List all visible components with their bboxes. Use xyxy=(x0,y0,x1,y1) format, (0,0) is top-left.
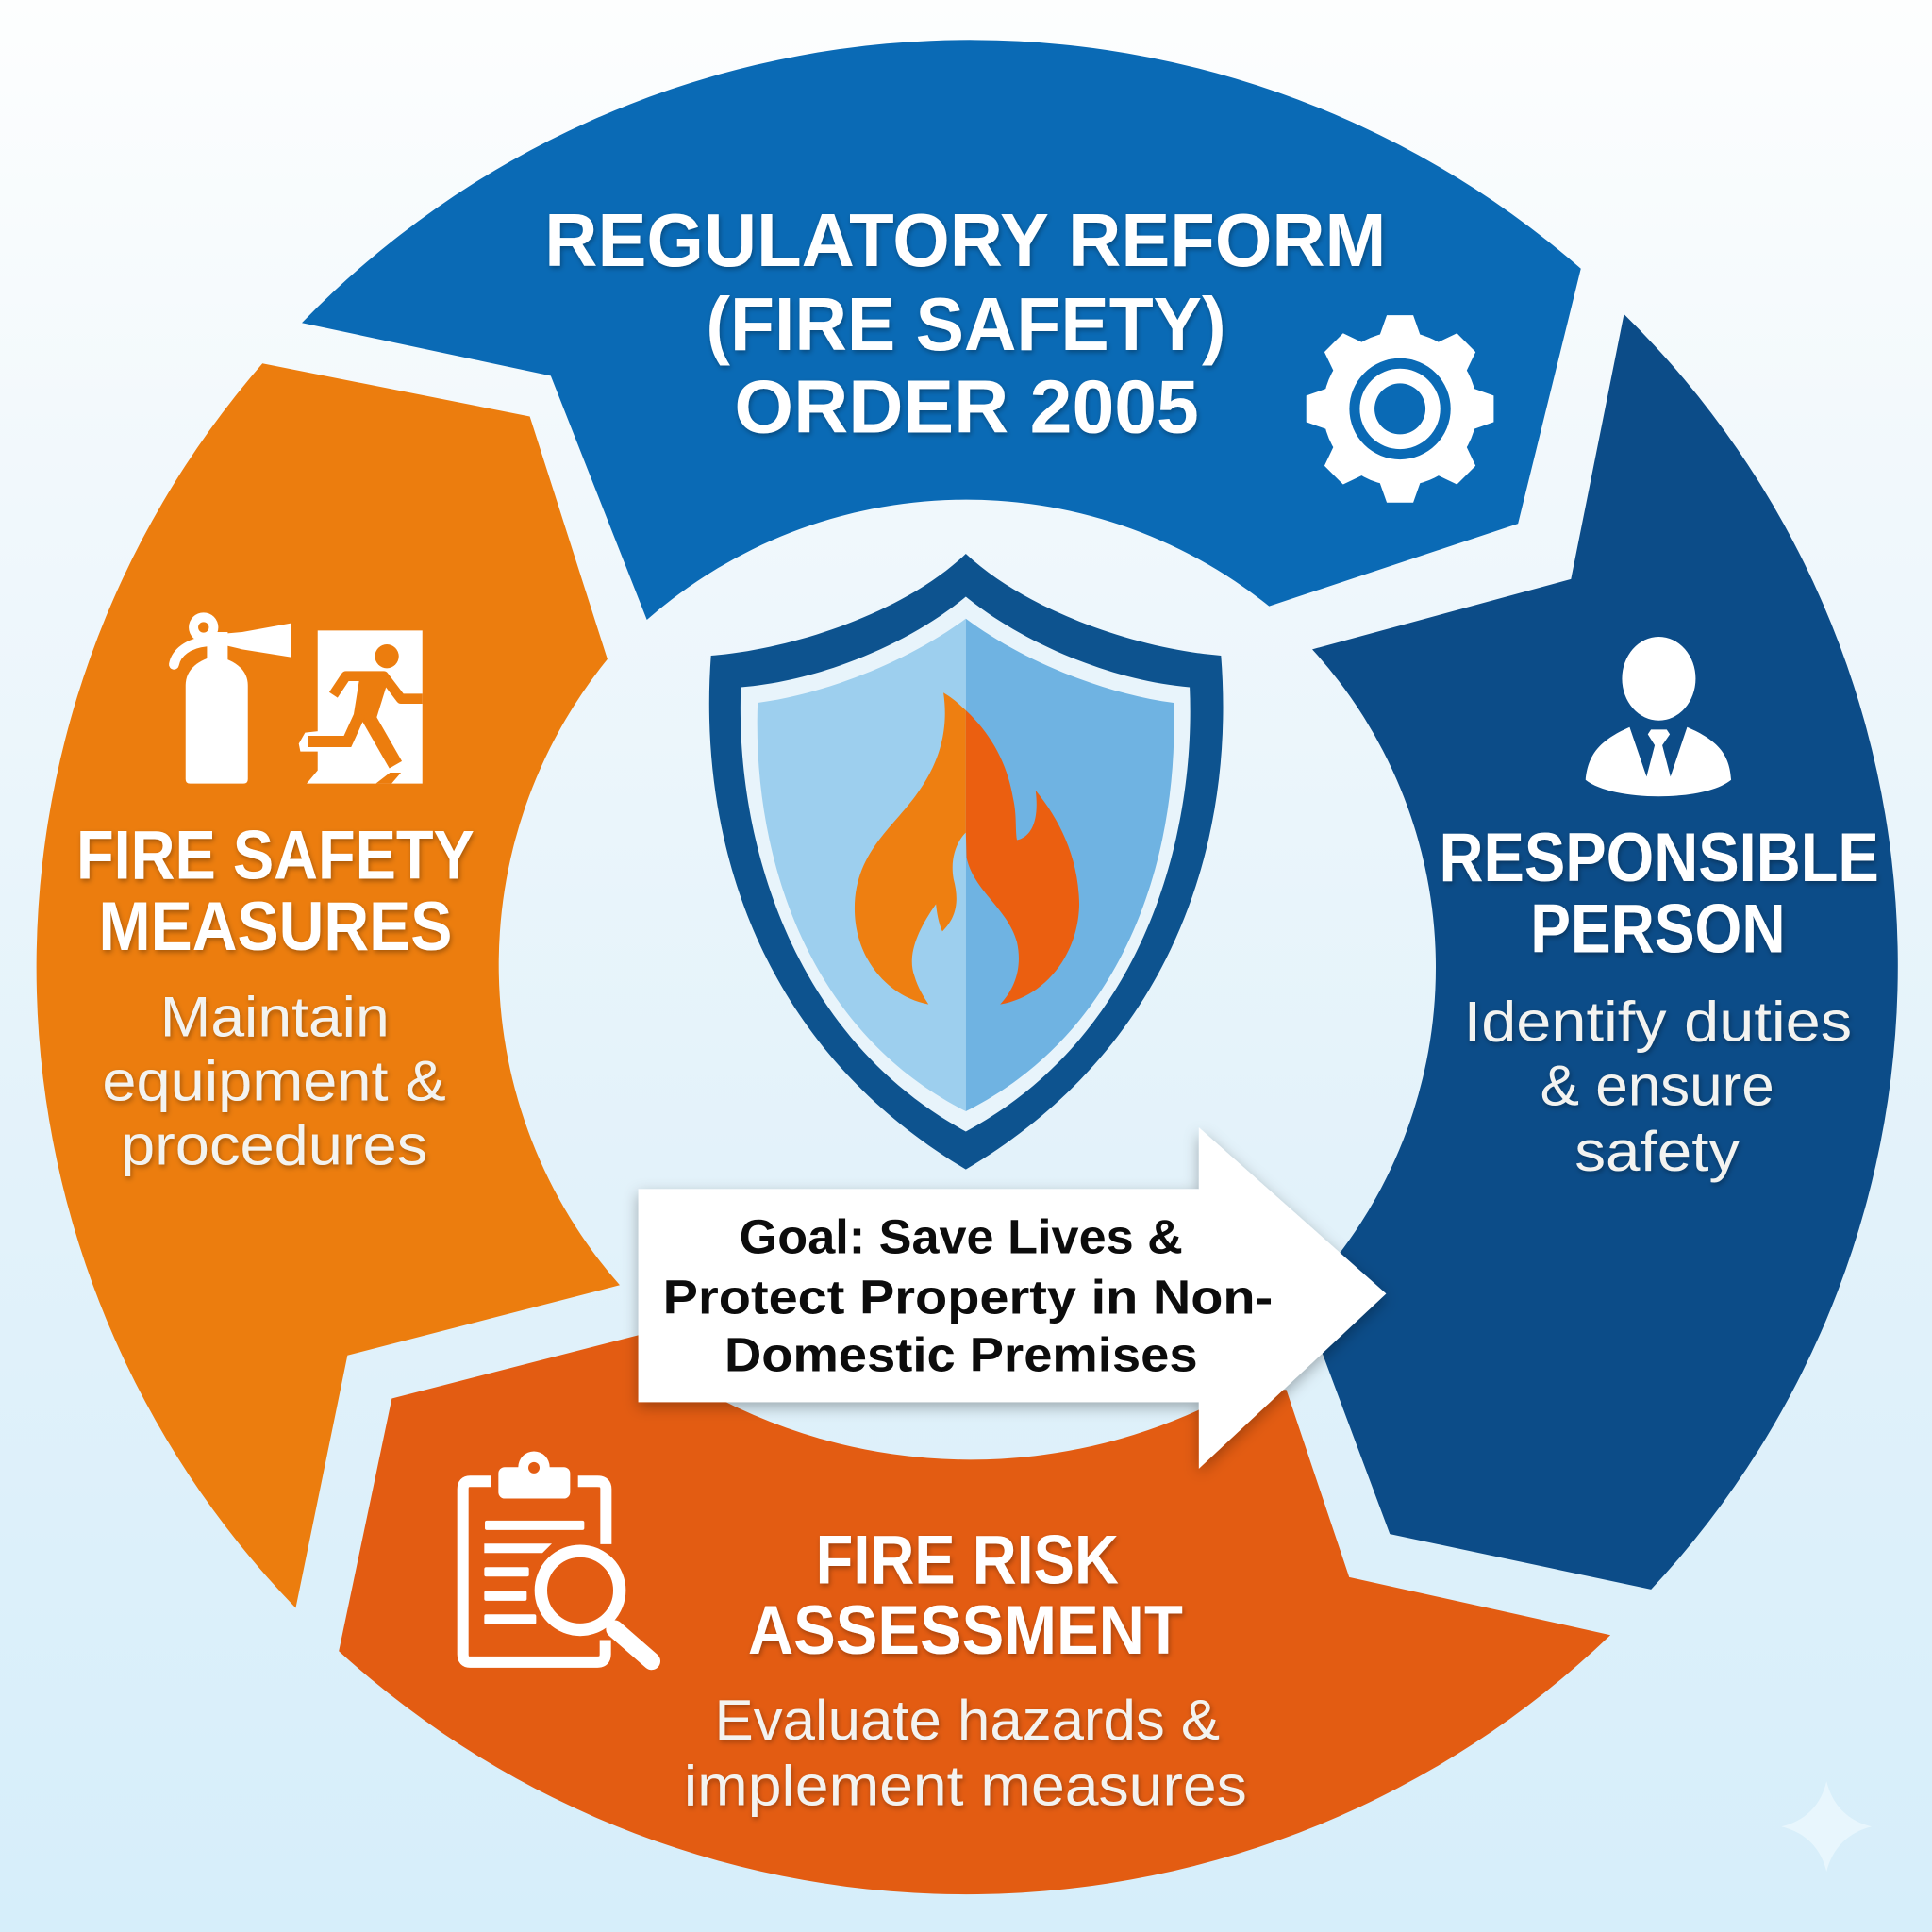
text: fire safety description: procedures xyxy=(121,1113,427,1176)
heading: regulatory reform xyxy=(544,198,1386,448)
arrow: goal callout: Protect Property in Non- xyxy=(663,1270,1273,1324)
heading: fire safety measures: MEASURES xyxy=(98,889,452,965)
text: fire safety description xyxy=(102,985,446,1176)
text: fire safety description: Maintain xyxy=(160,985,390,1048)
text: fire risk description: Evaluate hazards & xyxy=(715,1689,1220,1752)
arrow: goal callout: Domestic Premises xyxy=(724,1328,1198,1382)
text: fire risk description xyxy=(684,1689,1247,1817)
icon: clipboard with magnifier xyxy=(463,1452,652,1662)
segment: responsible person xyxy=(1312,314,1898,1590)
text: responsible person description: & ensure xyxy=(1541,1055,1774,1118)
arrow: goal callout xyxy=(639,1127,1386,1469)
heading: responsible person xyxy=(1440,820,1879,968)
text: responsible person description xyxy=(1464,991,1852,1183)
segment: regulatory reform xyxy=(302,40,1581,620)
heading: regulatory reform: (FIRE SAFETY) xyxy=(706,282,1226,366)
heading: responsible person: PERSON xyxy=(1530,891,1786,968)
icon: person in suit xyxy=(1586,637,1731,796)
heading: fire risk assessment: ASSESSMENT xyxy=(748,1592,1183,1669)
heading: fire safety measures: FIRE SAFETY xyxy=(76,817,475,893)
heading: fire risk assessment xyxy=(748,1522,1183,1669)
arrow: goal callout: Goal: Save Lives & xyxy=(740,1209,1183,1263)
heading: regulatory reform: REGULATORY REFORM xyxy=(544,198,1386,282)
text: fire safety description: equipment & xyxy=(102,1049,446,1112)
heading: responsible person: RESPONSIBLE xyxy=(1440,820,1879,896)
icon: sparkle watermark xyxy=(1781,1781,1872,1872)
segment: fire risk assessment xyxy=(339,1328,1610,1894)
central shield with flame xyxy=(709,554,1224,1170)
text: fire risk description: implement measures xyxy=(684,1754,1247,1817)
heading: fire safety measures xyxy=(76,817,475,965)
icon: gear xyxy=(1307,315,1493,503)
heading: fire risk assessment: FIRE RISK xyxy=(816,1522,1119,1598)
heading: regulatory reform: ORDER 2005 xyxy=(734,364,1199,448)
segment: fire safety measures xyxy=(37,363,620,1607)
text: responsible person description: safety xyxy=(1574,1120,1740,1183)
text: responsible person description: Identify duties xyxy=(1464,991,1852,1054)
icon: extinguisher and exit sign xyxy=(174,612,423,784)
